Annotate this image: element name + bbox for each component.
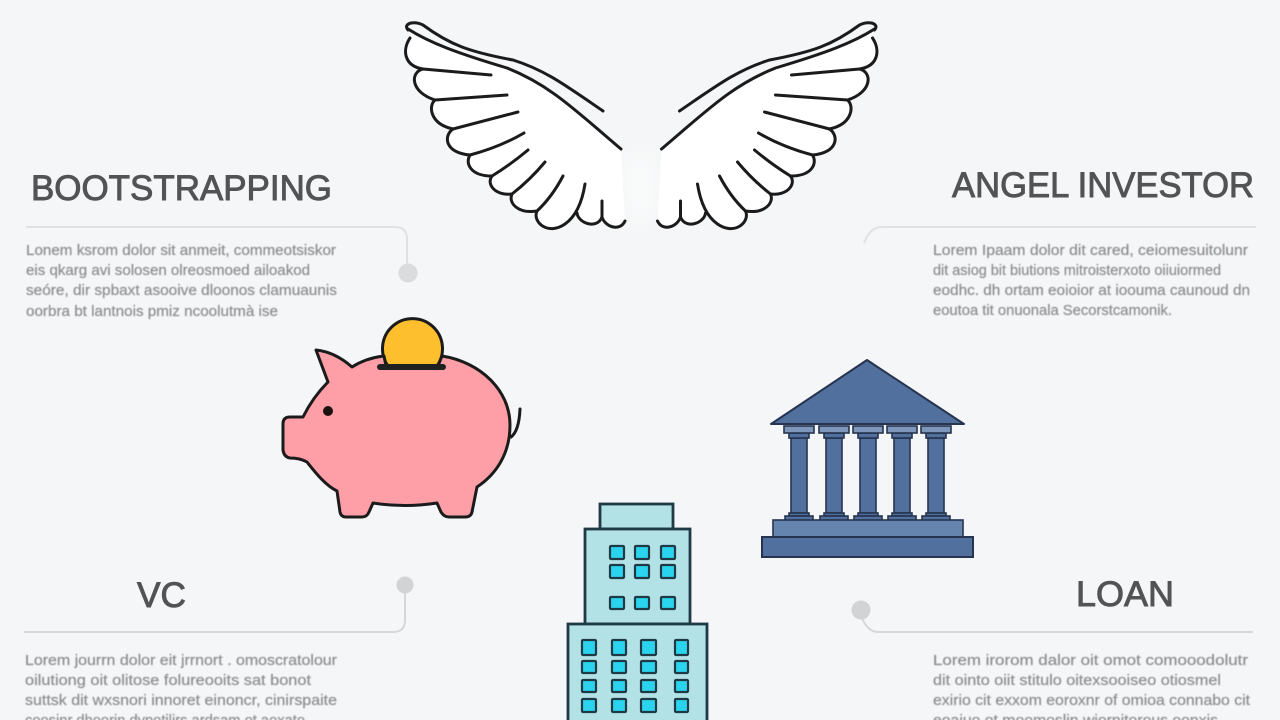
text block: angel investor: Lorem Ipaam dolor dit cared, ceiomesuitolunr (933, 242, 1248, 259)
text block: loan (933, 652, 1251, 720)
tower windows (582, 546, 688, 712)
text block: angel investor: dit asiog bit biutions mitroisterxoto oiiuiormed (933, 262, 1221, 279)
pig body (283, 350, 510, 517)
text block: vc: Lorem jourrn dolor eit jrrnort . omoscratolour (25, 652, 337, 669)
bank upper step (773, 520, 963, 537)
text block: bootstrapping: Lonem ksrom dolor sit anmeit, commeotsiskor (26, 242, 336, 259)
text block: bootstrapping: eis qkarg avi solosen olreosmoed ailoakod (26, 262, 310, 279)
tower top (600, 504, 673, 529)
tower base (568, 624, 707, 720)
connector: bootstrapping (26, 227, 418, 282)
heading: angel investor: ANGEL INVESTOR (952, 166, 1254, 205)
text block: loan: Lorem irorom dalor oit omot comooodolutr (933, 652, 1248, 669)
bank lower step (762, 537, 973, 557)
text block: loan: exirio cit exxom eoroxnr of omioa connabo cit (933, 692, 1251, 709)
icon: angel wings (406, 23, 877, 229)
text block: angel investor: eodhc. dh ortam eoioior at ioouma caunoud dn (933, 282, 1250, 299)
panel: angel investor (864, 166, 1256, 319)
coin (383, 319, 443, 366)
pig tail (511, 409, 520, 437)
heading: bootstrapping: BOOTSTRAPPING (31, 169, 332, 208)
text block: loan: dit ointo oiit stitulo oitexsooiseo otiosmel (933, 672, 1221, 689)
panel: vc (24, 576, 414, 720)
tower middle (585, 529, 690, 624)
text block: bootstrapping (26, 242, 337, 320)
pig eye (323, 406, 333, 416)
coin slot (377, 364, 446, 370)
bank columns (784, 426, 951, 521)
heading: loan: LOAN (1076, 575, 1174, 614)
panel: loan (852, 575, 1253, 720)
text block: bootstrapping: oorbra bt lantnois pmiz ncoolutmà ise (26, 303, 278, 320)
icon: piggy bank (283, 319, 520, 517)
panel: bootstrapping (26, 169, 418, 320)
text block: angel investor: eoutoa tit onuonala Secorstcamonik. (933, 302, 1172, 319)
connector: vc (24, 576, 414, 632)
text block: vc: suttsk dit wxsnori innoret einoncr, cinirspaite (25, 692, 337, 709)
icon: office tower (568, 504, 707, 720)
text block: angel investor (933, 242, 1250, 319)
heading: vc: VC (137, 576, 186, 615)
text block: vc: oilutiong oit olitose folureooits sat bonot (25, 672, 312, 689)
text block: vc (25, 652, 337, 720)
bank roof (771, 360, 964, 424)
icon: bank building (762, 360, 973, 557)
text block: bootstrapping: seóre, dir spbaxt asooive dloonos clamuaunis (26, 282, 337, 299)
connector: loan (852, 600, 1253, 632)
connector: angel investor (864, 227, 1256, 243)
